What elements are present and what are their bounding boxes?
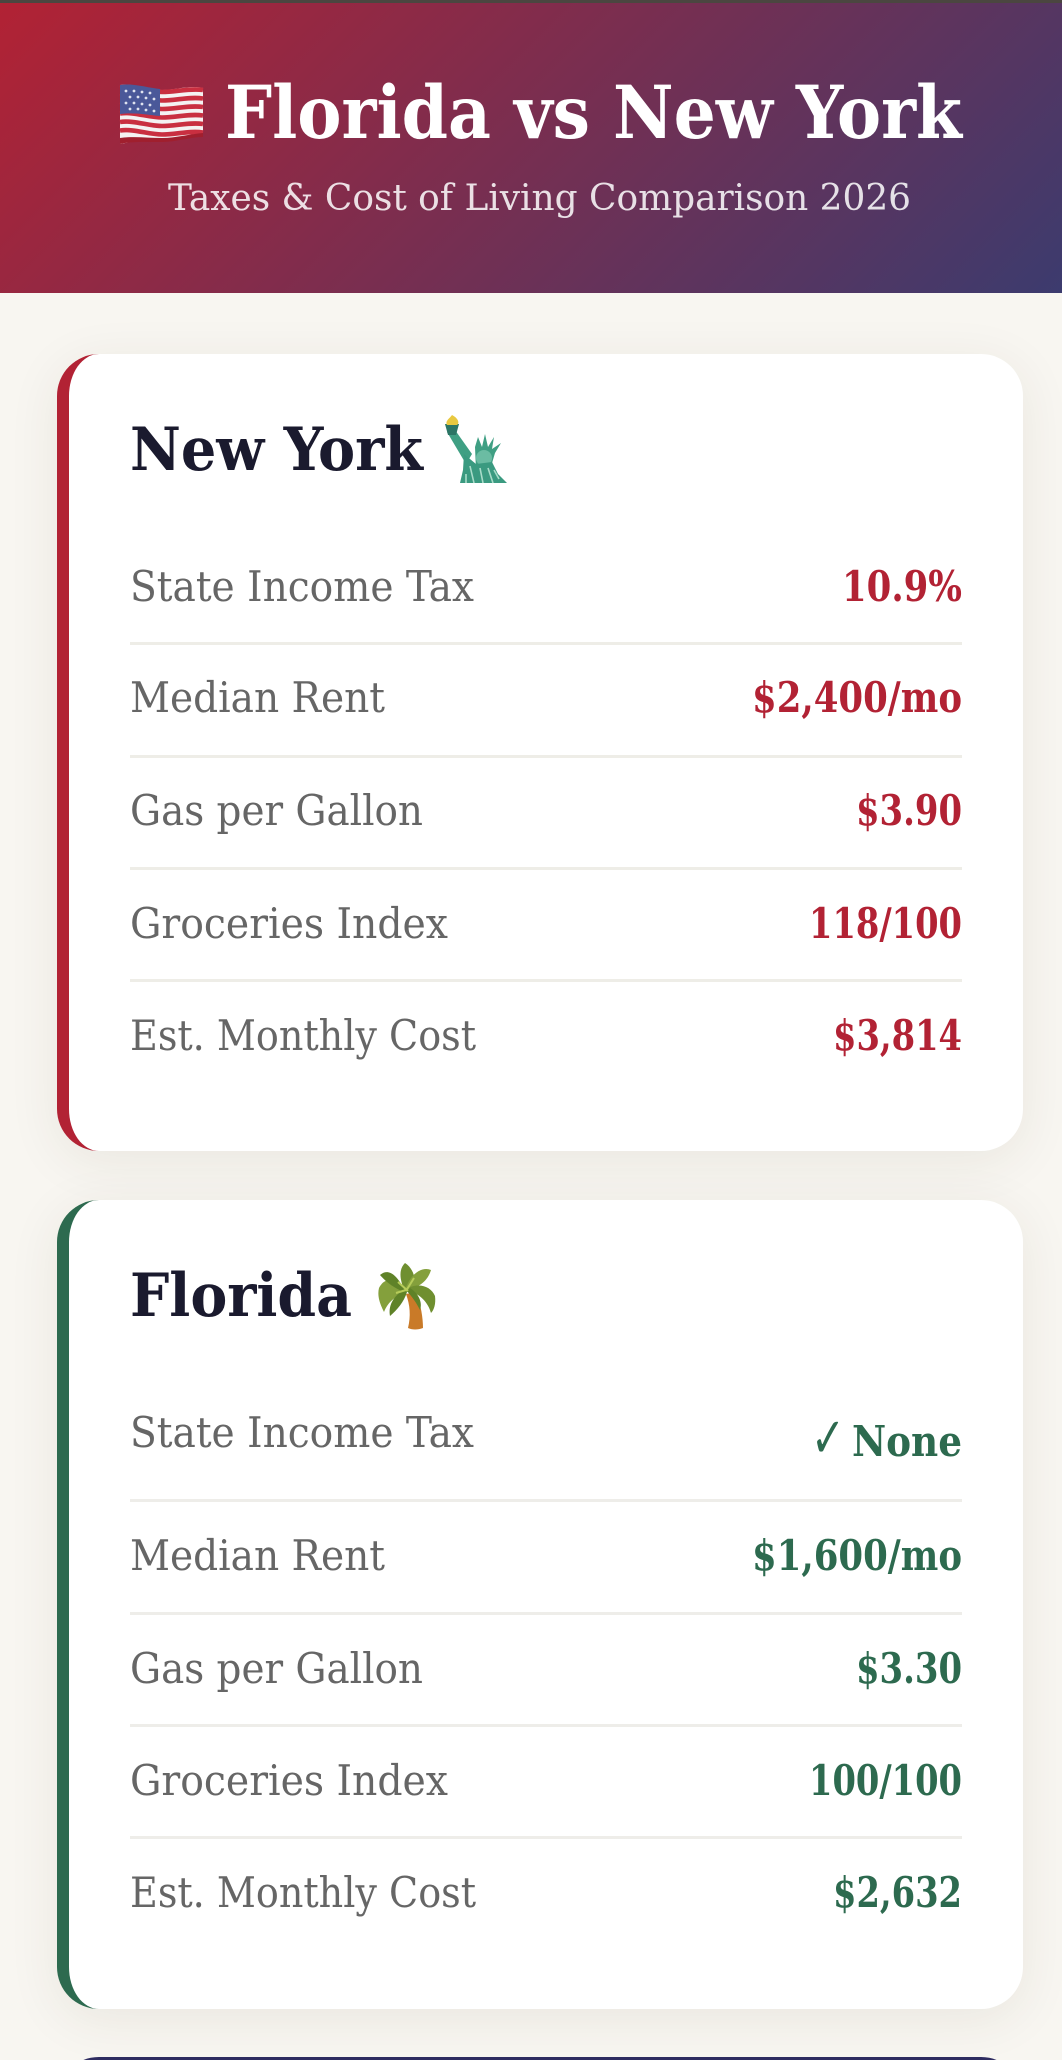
row: State Income Tax: State Income Tax: [130, 562, 474, 611]
row: Est. Monthly Cost: Est. Monthly Cost: [130, 1868, 476, 1917]
row: State Income Tax: None: [852, 1417, 962, 1466]
row: Gas per Gallon: Gas per Gallon: [130, 1644, 423, 1693]
row: Groceries Index: [130, 899, 962, 948]
panel: New York: [57, 354, 1023, 1151]
row: Median Rent: Median Rent: [130, 1531, 385, 1580]
subtitle: Taxes & Cost of Living Comparison 2026: [168, 178, 911, 219]
icon: palm tree: [378, 1263, 435, 1330]
row: Gas per Gallon: $3.30: [856, 1644, 962, 1693]
row: Groceries Index: [130, 1756, 962, 1805]
row: Median Rent: Median Rent: [130, 673, 385, 722]
row: Groceries Index: 100/100: [809, 1756, 962, 1805]
header banner: [0, 0, 1062, 293]
icon: Statue of Liberty: [445, 415, 507, 483]
row: Est. Monthly Cost: [130, 1011, 962, 1060]
row: Groceries Index: Groceries Index: [130, 899, 448, 948]
panel: Florida: [57, 1200, 1023, 2009]
row: State Income Tax: [130, 562, 962, 611]
row: Groceries Index: 118/100: [809, 899, 962, 948]
row: Gas per Gallon: [130, 786, 962, 835]
row: Est. Monthly Cost: [130, 1868, 962, 1917]
heading: New York: New York: [130, 415, 425, 485]
row: Groceries Index: Groceries Index: [130, 1756, 448, 1805]
row: State Income Tax: ✓: [811, 1406, 845, 1471]
heading: Florida: Florida: [130, 1261, 352, 1331]
row: State Income Tax: [130, 1406, 962, 1471]
row: State Income Tax: State Income Tax: [130, 1408, 474, 1457]
row: Est. Monthly Cost: $2,632: [833, 1868, 962, 1917]
row: Est. Monthly Cost: $3,814: [833, 1011, 962, 1060]
row: State Income Tax: 10.9%: [842, 562, 962, 611]
row: Median Rent: $1,600/mo: [752, 1531, 962, 1580]
title: Florida vs New York: [225, 70, 963, 156]
row: Gas per Gallon: [130, 1644, 962, 1693]
row: Gas per Gallon: Gas per Gallon: [130, 786, 423, 835]
row: Median Rent: [130, 673, 962, 722]
icon: US flag: [120, 85, 203, 144]
row: Median Rent: $2,400/mo: [752, 673, 962, 722]
row: Est. Monthly Cost: Est. Monthly Cost: [130, 1011, 476, 1060]
panel: next card top edge: [84, 2057, 996, 2060]
row: Median Rent: [130, 1531, 962, 1580]
row: Gas per Gallon: $3.90: [856, 786, 962, 835]
